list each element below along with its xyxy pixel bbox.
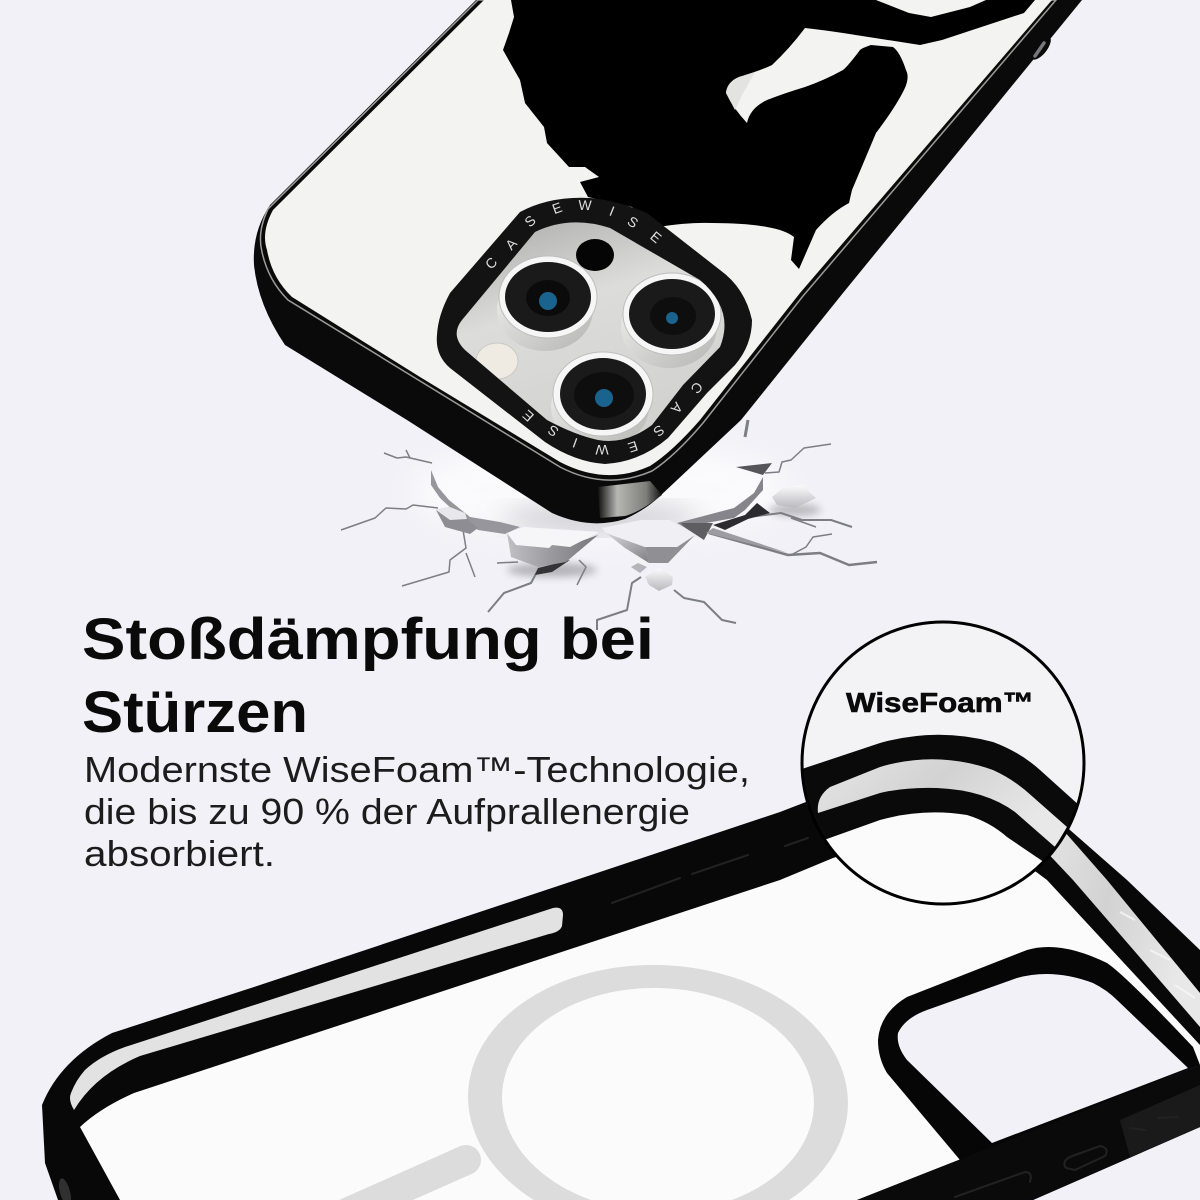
- ring lettering: A: [502, 235, 520, 253]
- heading: Stoßdämpfung bei: [82, 607, 654, 672]
- ring lettering: E: [626, 438, 640, 456]
- right rock plate top: [602, 520, 695, 547]
- ring lettering: S: [545, 422, 561, 440]
- lower side band: [857, 1065, 1200, 1200]
- left crack wall: [431, 470, 520, 534]
- ring lettering: S: [521, 212, 539, 230]
- camera opening: [457, 222, 724, 441]
- rim highlight: [260, 0, 1056, 480]
- body text: [84, 749, 750, 874]
- lens: bottom: [551, 352, 653, 448]
- dark crevice under plate: [535, 560, 570, 575]
- artwork grey shading: [726, 72, 755, 110]
- magnifier outline: [802, 622, 1084, 904]
- white back panel: [265, 0, 1052, 475]
- ring lettering: W: [595, 442, 609, 458]
- cracked ground: [341, 420, 877, 630]
- clear back panel: [80, 830, 1200, 1200]
- bumper highlight: [598, 481, 662, 518]
- magsafe ring: [463, 958, 853, 1200]
- black silhouette artwork: [503, 0, 1035, 269]
- lower side texture: [1120, 1085, 1200, 1157]
- heading: [82, 607, 654, 745]
- ring lettering: C: [482, 254, 500, 272]
- right rock plate left facet: [606, 533, 649, 563]
- ground shadows under plates: [507, 563, 597, 577]
- left side port: [57, 1177, 73, 1200]
- magnifier fill: [802, 622, 1084, 904]
- crack lines: [341, 420, 877, 630]
- right rock plate right facet: [645, 535, 695, 563]
- ring lettering: [482, 197, 706, 458]
- body text: Modernste WiseFoam™-Technologie,: [84, 749, 750, 790]
- dark wedge: [681, 523, 713, 540]
- small rock left: [436, 507, 478, 534]
- foam streaks: [1120, 912, 1195, 998]
- camera ring: [437, 198, 752, 464]
- magnified case corner: [804, 734, 1077, 861]
- ring lettering: E: [647, 228, 665, 246]
- small rock bottom: [631, 563, 673, 591]
- lens: right: [621, 273, 721, 368]
- camera cut-out opening: [898, 974, 1188, 1143]
- bottom phone case: [42, 756, 1200, 1200]
- top phone with case: [254, 0, 1082, 523]
- ring lettering: I: [570, 435, 580, 451]
- left rock plate top: [507, 527, 599, 548]
- black bumper: [254, 0, 1082, 523]
- foam magnifier callout: [790, 622, 1090, 910]
- black frame: [42, 756, 1200, 1200]
- lens: upper left: [497, 256, 597, 351]
- side button bump: [1028, 33, 1054, 63]
- dark crack gap: [713, 503, 770, 530]
- ring lettering: I: [607, 203, 617, 219]
- ring lettering: C: [688, 379, 706, 397]
- ring lettering: S: [625, 213, 641, 231]
- ring lettering: E: [519, 407, 537, 425]
- lower buttons: [612, 838, 1178, 1197]
- ring lettering: S: [650, 422, 668, 440]
- flash: [476, 343, 518, 379]
- camera cut-out frame: [878, 947, 1200, 1160]
- microphone hole: [576, 239, 614, 271]
- dark shard: [736, 463, 772, 475]
- magsafe alignment bar: [340, 1160, 466, 1200]
- ring lettering: W: [578, 197, 593, 213]
- rock shadow right: [769, 504, 821, 516]
- ring lettering: A: [667, 399, 686, 417]
- magnifier label: WiseFoam™: [846, 687, 1034, 718]
- body text: absorbiert.: [84, 833, 275, 874]
- ring lettering: E: [550, 199, 564, 217]
- heading: Stürzen: [82, 680, 308, 745]
- right crack wall: [677, 477, 763, 527]
- left rock plate side: [507, 533, 598, 567]
- left foam slot: [70, 908, 563, 1110]
- small rock right: [772, 485, 816, 508]
- raised surface glow: [410, 440, 790, 540]
- impact shadow: [500, 508, 700, 528]
- body text: die bis zu 90 % der Aufprallenergie: [84, 791, 690, 832]
- broken ground face: [706, 528, 788, 553]
- right foam strip: [1040, 815, 1200, 1027]
